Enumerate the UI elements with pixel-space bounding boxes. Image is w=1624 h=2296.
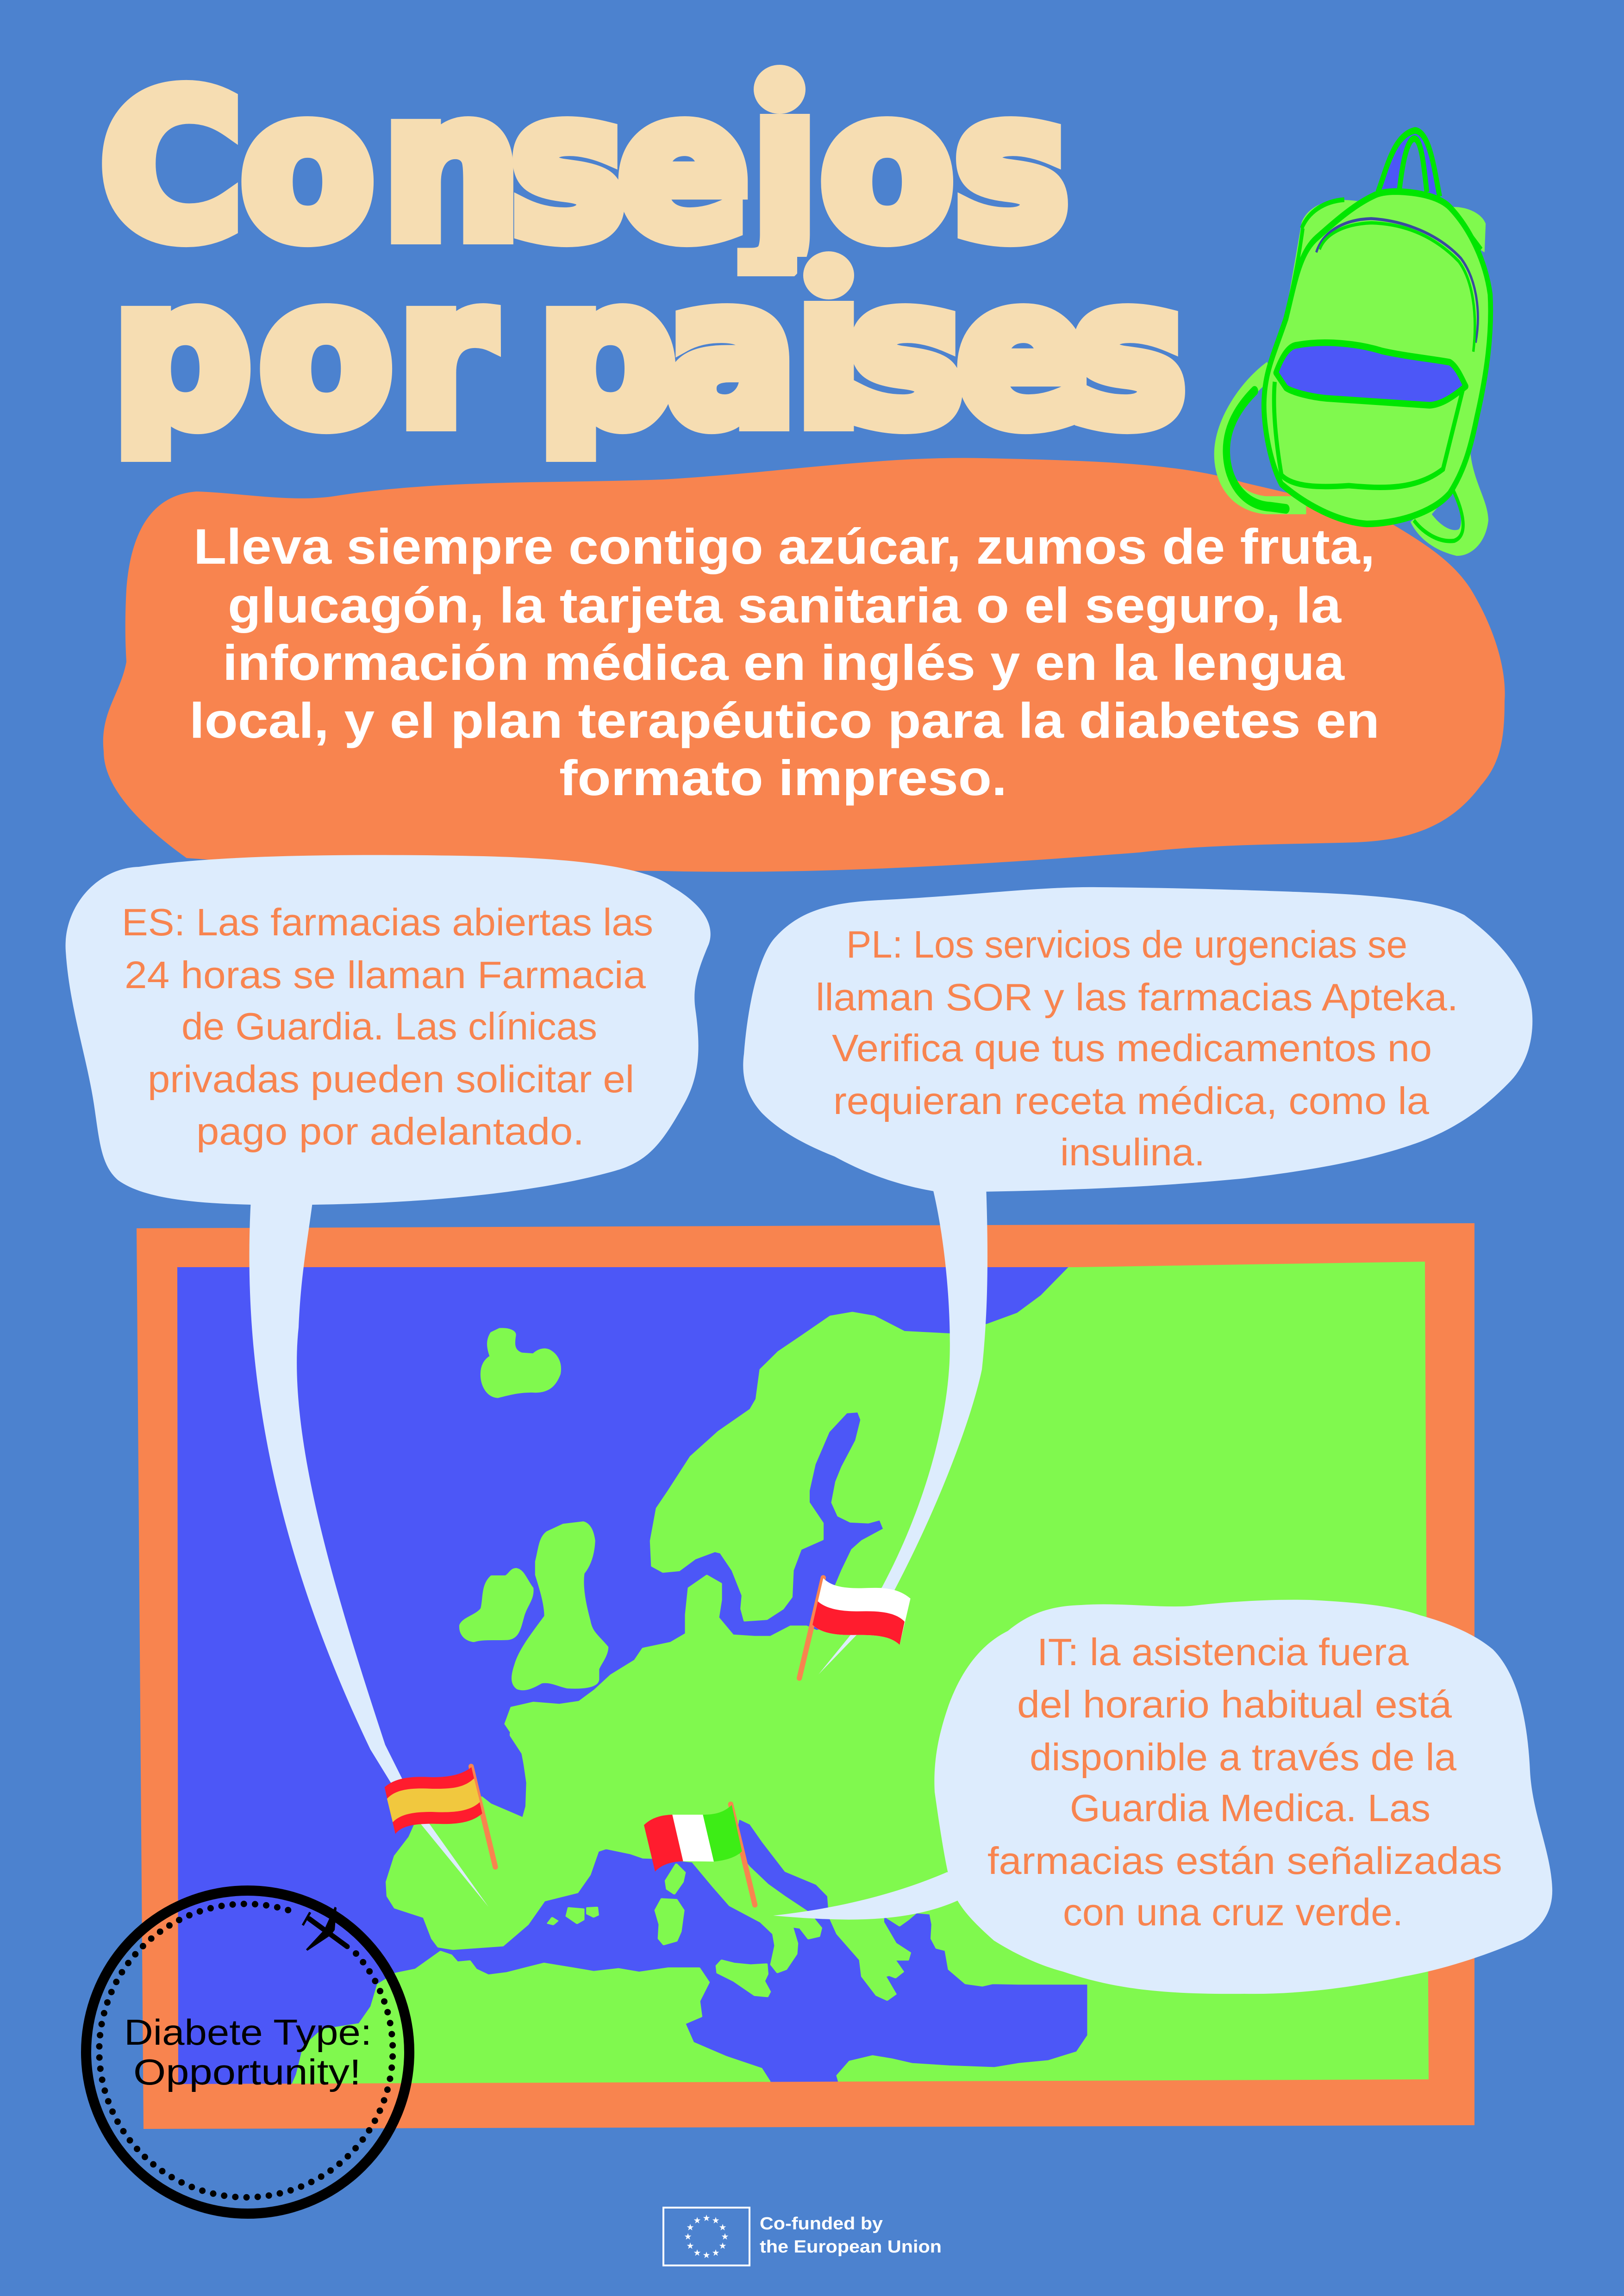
text: co-funded <box>760 2214 942 2257</box>
flag: Poland <box>800 1578 911 1678</box>
text: PL <box>816 923 1458 1174</box>
text: IT: IT: la asistencia fuera <box>1037 1630 1409 1674</box>
text: PL: requieran receta médica, como la <box>833 1079 1430 1122</box>
icon: EU stars: ★ <box>686 2241 694 2251</box>
icon: airplane <box>303 1907 347 1951</box>
text: advice: formato impreso. <box>559 750 1007 806</box>
text: stamp label: Diabete Type: <box>124 2012 372 2053</box>
logo: EU co-funded <box>663 2208 942 2265</box>
text: IT: disponible a través de la <box>1030 1736 1457 1779</box>
icon: EU stars: ★ <box>718 2241 727 2251</box>
text: IT: del horario habitual está <box>1017 1683 1452 1726</box>
text: ES <box>122 901 653 1153</box>
icon: EU stars <box>684 2213 729 2260</box>
icon: EU stars: ★ <box>721 2232 729 2242</box>
text: advice: información médica en inglés y en la lengua <box>223 635 1345 691</box>
text: stamp label: Opportunity! <box>133 2052 361 2092</box>
flag: Italy <box>644 1804 755 1905</box>
icon: EU stars: ★ <box>684 2232 692 2242</box>
icon: EU stars: ★ <box>718 2222 727 2233</box>
icon: EU stars: ★ <box>702 2213 711 2223</box>
text: ES: 24 horas se llaman Farmacia <box>125 953 646 996</box>
text: PL: PL: Los servicios de urgencias se <box>846 923 1407 966</box>
text: advice: local, y el plan terapéutico para la diabetes en <box>189 692 1380 748</box>
title <box>100 51 1186 485</box>
text: IT: con una cruz verde. <box>1063 1891 1403 1934</box>
text: ES: pago por adelantado. <box>196 1110 584 1153</box>
icon: EU stars: ★ <box>693 2248 701 2258</box>
text: PL: llaman SOR y las farmacias Apteka. <box>816 976 1458 1019</box>
text: ES: de Guardia. Las clínicas <box>181 1005 597 1048</box>
speech bubble: ES <box>66 855 711 1907</box>
icon: EU stars: ★ <box>712 2215 720 2226</box>
text: IT: Guardia Medica. Las <box>1070 1786 1430 1829</box>
title: por paises <box>113 238 1186 470</box>
map land <box>291 1260 1432 2090</box>
text: IT <box>987 1630 1502 1934</box>
text: ES: ES: Las farmacias abiertas las <box>122 901 653 944</box>
text: co-funded: Co-funded by <box>760 2214 883 2234</box>
text: co-funded: the European Union <box>760 2237 942 2257</box>
icon: EU stars: ★ <box>693 2215 701 2226</box>
title: Consejos <box>100 51 1069 283</box>
panel: orange advice blob <box>103 458 1505 872</box>
text: advice <box>189 518 1380 806</box>
flag: Spain <box>385 1767 495 1867</box>
icon: EU stars: ★ <box>712 2248 720 2258</box>
stamp: Diabete Type Opportunity <box>86 1891 409 2214</box>
speech bubble: PL <box>743 887 1532 1674</box>
text: ES: privadas pueden solicitar el <box>148 1058 634 1101</box>
icon: EU stars: ★ <box>686 2222 694 2233</box>
text: stamp label <box>124 2012 372 2092</box>
text: advice: glucagón, la tarjeta sanitaria o el seguro, la <box>228 577 1342 633</box>
text: advice: Lleva siempre contigo azúcar, zumos de fruta, <box>194 518 1375 574</box>
text: PL: Verifica que tus medicamentos no <box>832 1027 1432 1070</box>
icon: green backpack <box>1221 131 1491 556</box>
map panel <box>137 1223 1474 2129</box>
speech bubble: IT <box>773 1600 1552 1994</box>
text: IT: farmacias están señalizadas <box>987 1839 1502 1882</box>
text: PL: insulina. <box>1060 1131 1205 1174</box>
icon: EU stars: ★ <box>702 2250 711 2260</box>
